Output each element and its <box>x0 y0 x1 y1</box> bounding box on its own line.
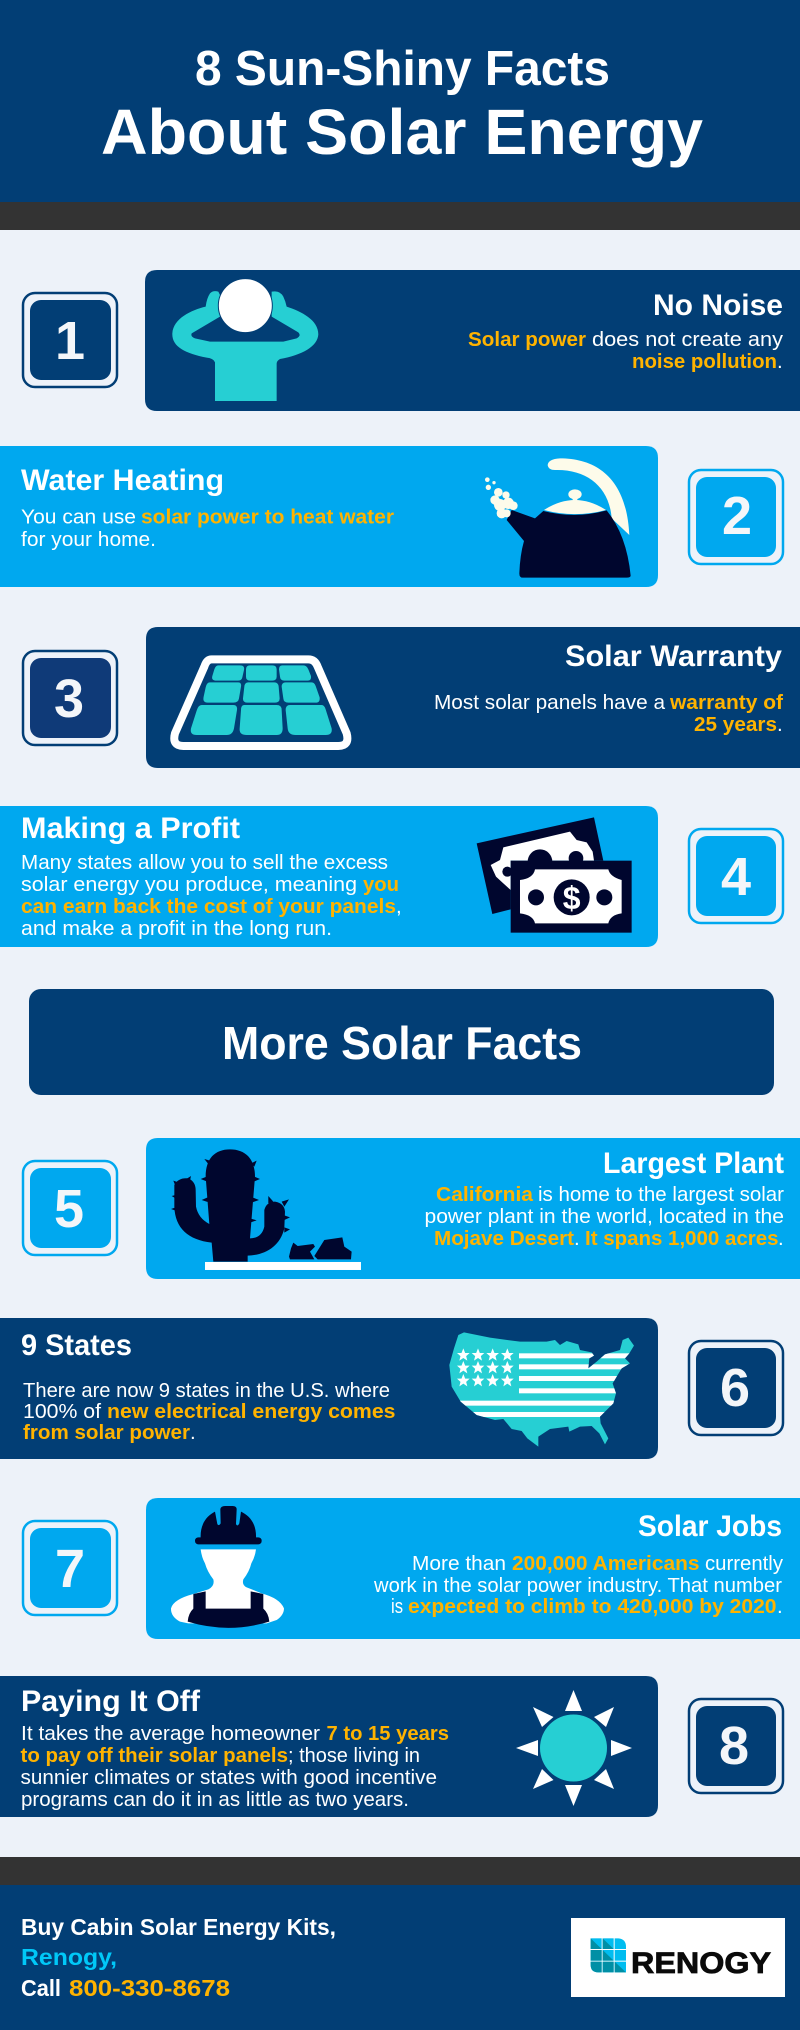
body text: . <box>777 713 783 736</box>
body text: Most solar panels have a <box>434 691 666 714</box>
body text <box>468 328 784 373</box>
number badge 4 <box>689 829 783 923</box>
icon: person holding head <box>172 279 318 401</box>
body text: It spans 1,000 acres <box>585 1227 778 1250</box>
number badge 4: 4 <box>721 847 751 907</box>
heading: Water Heating <box>21 464 224 497</box>
call to action text: 800-330-8678 <box>69 1975 230 2001</box>
panel: water heating <box>0 446 658 587</box>
number badge 5 <box>23 1161 117 1255</box>
icon: kettle <box>485 458 631 578</box>
panel: solar warranty <box>146 627 800 768</box>
number badge 8 <box>689 1699 783 1793</box>
body text <box>21 506 394 551</box>
body text: solar energy you produce, meaning <box>21 873 357 896</box>
body text: to pay off their solar panels <box>20 1744 288 1767</box>
number badge 3: 3 <box>54 669 84 729</box>
body text: for your home. <box>21 528 156 551</box>
section banner: More Solar Facts <box>29 989 774 1095</box>
number badge 3 <box>23 651 117 745</box>
body text: 7 to 15 years <box>326 1722 449 1745</box>
fact 8: Paying It Off <box>0 1676 783 1817</box>
number badge 1: 1 <box>55 311 85 371</box>
number badge 7 <box>23 1521 117 1615</box>
body text <box>373 1552 784 1618</box>
body text <box>20 1722 449 1811</box>
body text: Many states allow you to sell the excess <box>21 851 388 874</box>
body text: noise pollution <box>632 350 777 373</box>
body text: California <box>436 1183 534 1206</box>
footer <box>0 1857 800 2030</box>
body text: can earn back the cost of your panels <box>21 895 396 918</box>
body text: . <box>777 1595 783 1618</box>
body text <box>21 851 402 940</box>
call to action text: Call <box>21 1975 61 2001</box>
number badge 6: 6 <box>720 1358 750 1418</box>
panel: largest plant <box>146 1138 800 1279</box>
body text: sunnier climates or states with good incentive <box>20 1766 437 1789</box>
body text: solar power to heat water <box>141 506 394 528</box>
body text: does not create any <box>592 328 784 351</box>
body text: 100% of <box>23 1400 101 1423</box>
icon: solar worker <box>171 1506 284 1628</box>
number badge 2 <box>689 470 783 564</box>
body text: Solar power <box>468 328 586 351</box>
heading: Making a Profit <box>21 812 240 845</box>
body text: ; those living in <box>288 1744 420 1767</box>
body text: warranty of <box>669 691 783 714</box>
fact 4: Making a Profit <box>0 806 783 947</box>
body text: from solar power <box>23 1421 190 1444</box>
panel: solar jobs <box>146 1498 800 1639</box>
body text: . <box>778 1227 784 1250</box>
title: 8 Sun-Shiny Facts <box>195 42 610 96</box>
call to action text: Buy Cabin Solar Energy Kits, <box>21 1914 336 1940</box>
fact 6: 9 States <box>0 1318 783 1459</box>
number badge 8: 8 <box>719 1716 749 1776</box>
number badge 5: 5 <box>54 1179 84 1239</box>
fact 1: No Noise <box>23 270 800 411</box>
number badge 2: 2 <box>722 486 752 546</box>
fact 3: Solar Warranty <box>23 627 800 768</box>
body text: is <box>391 1595 403 1618</box>
body text: and make a profit in the long run. <box>21 917 332 940</box>
logo: Renogy <box>571 1918 785 1997</box>
body text: 25 years <box>694 713 777 736</box>
body text <box>434 691 783 736</box>
body text: work in the solar power industry. That number <box>373 1574 782 1597</box>
panel: making a profit <box>0 806 658 947</box>
body text: power plant in the world, located in the <box>424 1205 784 1228</box>
panel: no noise <box>145 270 800 411</box>
body text: , <box>396 895 402 918</box>
icon: cactus <box>171 1149 361 1270</box>
fact 7: Solar Jobs <box>23 1498 800 1639</box>
heading: Solar Warranty <box>565 640 782 673</box>
body text: currently <box>705 1552 784 1575</box>
body text: You can use <box>21 506 136 528</box>
call to action text <box>21 1914 336 2001</box>
panel: 9 states <box>0 1318 658 1459</box>
body text: . <box>190 1421 196 1444</box>
body text <box>424 1183 784 1250</box>
body text: It takes the average homeowner <box>21 1722 320 1745</box>
call to action text: Renogy, <box>21 1944 117 1970</box>
icon: US map flag <box>440 1332 640 1447</box>
body text: expected to climb to 420,000 by 2020 <box>408 1595 776 1618</box>
heading: No Noise <box>653 289 783 322</box>
body text: new electrical energy comes <box>107 1400 396 1423</box>
icon: money bills <box>477 817 632 933</box>
body text: is home to the largest solar <box>538 1183 784 1206</box>
icon: sun <box>516 1690 632 1806</box>
heading: Solar Jobs <box>638 1510 782 1543</box>
body text: Mojave Desert <box>434 1227 574 1250</box>
title <box>101 42 703 168</box>
icon: money bills: $ <box>563 880 581 916</box>
heading: Largest Plant <box>603 1147 784 1180</box>
number badge 6 <box>689 1341 783 1435</box>
section banner: More Solar Facts: More Solar Facts <box>222 1017 582 1069</box>
number badge 7: 7 <box>55 1539 85 1599</box>
body text: More than <box>412 1552 506 1575</box>
body text: There are now 9 states in the U.S. where <box>23 1379 390 1402</box>
fact 5: Largest Plant <box>23 1138 800 1279</box>
panel: paying it off <box>0 1676 658 1817</box>
body text: . <box>574 1227 580 1250</box>
body text: programs can do it in as little as two years. <box>21 1788 409 1811</box>
body text: . <box>777 350 783 373</box>
body text: 200,000 Americans <box>512 1552 700 1575</box>
number badge 1 <box>23 293 117 387</box>
body text <box>23 1379 396 1444</box>
logo: Renogy: RENOGY <box>631 1947 771 1980</box>
fact 2: Water Heating <box>0 446 783 587</box>
header banner <box>0 0 800 230</box>
heading: Paying It Off <box>21 1685 201 1718</box>
body text: you <box>363 873 399 896</box>
heading: 9 States <box>21 1329 132 1362</box>
icon: solar panel <box>174 659 347 746</box>
title: About Solar Energy <box>101 96 703 168</box>
